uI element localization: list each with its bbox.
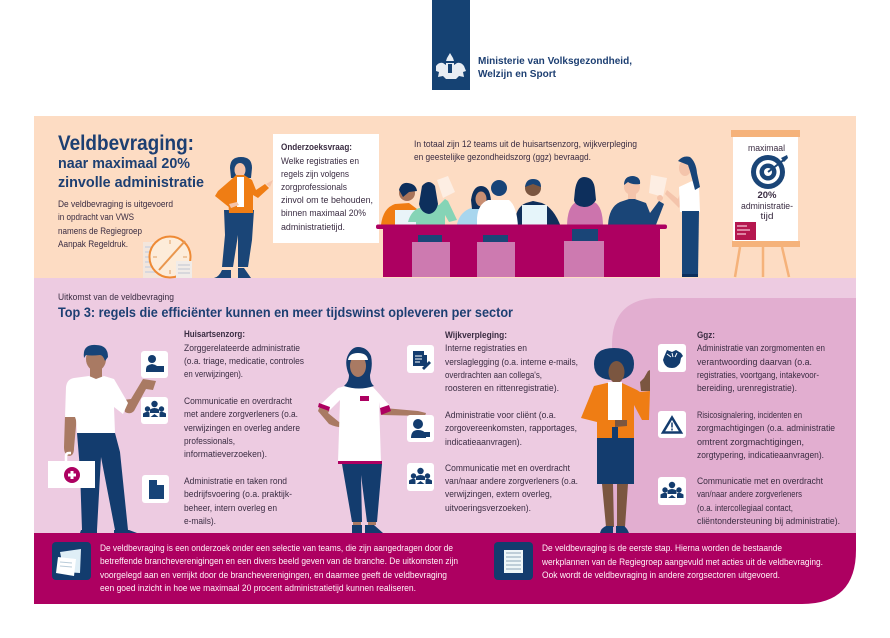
text: huisartsenzorg: verwijzingen en overleg andere: [184, 423, 300, 433]
footer text right: werkplannen van de Regiegroep aangevuld met acties uit de veldbevraging.: [541, 557, 823, 567]
text: huisartsenzorg: (o.a. triage, medicatie, controles: [184, 356, 305, 366]
icon: team of three: [658, 477, 686, 505]
footer text right: De veldbevraging is de eerste stap. Hierna worden de bestaande: [542, 543, 782, 553]
text: wijkverpleging: Interne registraties en: [445, 343, 527, 353]
text: ggz: (o.a. intercollegiaal contact,: [697, 503, 793, 513]
text: wijkverpleging: Administratie voor cliënt (o.a.: [445, 410, 556, 420]
section heading: uitkomst: Top 3: regels die efficiënter kunnen en meer tijdswinst opleveren per sector: [58, 304, 513, 320]
easel with goal poster: tijd: [760, 211, 774, 221]
person: navy sweater with raised hand: [608, 175, 667, 230]
figure: male doctor with medical case: [48, 345, 156, 533]
text: huisartsenzorg: e-mails).: [184, 516, 216, 526]
paper held up: [437, 176, 455, 198]
text: ggz: zorgmachtigingen (o.a. administratie: [697, 423, 835, 433]
easel with goal poster: administratie-: [741, 201, 793, 211]
text: ggz: [697, 330, 840, 526]
icon: documents: [407, 345, 434, 373]
easel with goal poster: maximaal: [748, 143, 785, 153]
text: huisartsenzorg: met andere zorgverleners (o.a.: [184, 409, 298, 419]
intro text: in opdracht van VWS: [58, 212, 134, 222]
text: ggz: Risicosignalering, incidenten en: [697, 410, 802, 420]
icon: target: [751, 155, 788, 189]
text: ggz: verantwoording daarvan (o.a.: [697, 357, 812, 367]
text box: onderzoeksvraag: regels zijn volgens: [281, 169, 350, 179]
title block: [58, 132, 204, 191]
text: ggz: omtrent zorgmachtigingen,: [697, 437, 804, 447]
easel with goal poster: 20%: [758, 190, 777, 200]
person: white shirt seen from back: [477, 180, 518, 227]
ministry name: [478, 55, 632, 80]
icon: team of three: [141, 397, 168, 424]
footer text left: [100, 543, 458, 593]
text box: onderzoeksvraag: binnen maximaal 20%: [281, 208, 366, 218]
icon: stack of forms: [658, 344, 686, 372]
text: wijkverpleging: verwijzingen, extern overleg,: [445, 489, 552, 499]
title block: Veldbevraging:: [58, 132, 194, 155]
text box: onderzoeksvraag: administratietijd.: [281, 222, 345, 232]
text: ggz: zorgtypering, indicatieaanvragen).: [697, 450, 824, 460]
section heading: uitkomst: Uitkomst van de veldbevraging: [58, 292, 174, 302]
text: teams bevraagd: In totaal zijn 12 teams uit de huisartsenzorg, wijkverpleging: [414, 139, 637, 149]
icon: clock with paper stacks: [143, 236, 192, 278]
text: wijkverpleging: van/naar andere zorgverleners (o.a.: [445, 476, 578, 486]
intro text: Aanpak Regeldruk.: [58, 239, 128, 249]
logo ribbon: [432, 0, 470, 90]
header: ministry logo: [432, 0, 632, 90]
text: wijkverpleging: indicatieaanvragen).: [445, 437, 522, 447]
text: huisartsenzorg: [184, 329, 305, 526]
ministry name: Welzijn en Sport: [478, 68, 556, 80]
text: wijkverpleging: Communicatie met en overdracht: [445, 463, 571, 473]
icon: documents on navy tile: [52, 542, 91, 580]
text: huisartsenzorg: bedrijfsvoering (o.a. praktijk-: [184, 489, 292, 499]
figure: nurse with headscarf: [318, 347, 426, 533]
panel: peach introduction background: [34, 116, 856, 278]
text: huisartsenzorg: informatieverzoeken).: [184, 449, 267, 459]
text box: onderzoeksvraag: Onderzoeksvraag:: [281, 142, 352, 152]
illustration: team at table: [376, 156, 700, 277]
text: teams bevraagd: en geestelijke gezondheidszorg (ggz) bevraagd.: [414, 152, 591, 162]
text box: onderzoeksvraag: zinvol om te behouden,: [281, 195, 373, 205]
icon: office building: [142, 475, 169, 503]
title block: naar maximaal 20%: [58, 155, 190, 172]
text: wijkverpleging: zorgovereenkomsten, rapportages,: [445, 423, 577, 433]
ministry name: Ministerie van Volksgezondheid,: [478, 55, 632, 67]
person: pink top seen from back: [567, 177, 603, 229]
panel: pink results background: [34, 278, 856, 534]
text box: onderzoeksvraag: zorgprofessionals: [281, 182, 348, 192]
footer text left: De veldbevraging is een onderzoek onder een selectie van teams, die zijn aangedragen door de: [100, 543, 453, 553]
intro text: [58, 199, 173, 249]
text: wijkverpleging: verslaglegging (o.a. interne e-mails,: [445, 357, 578, 367]
text: wijkverpleging: Wijkverpleging:: [445, 330, 507, 340]
footer text left: voorgelegd aan en verrijkt door de brancheverenigingen, en daarmee geeft de veldbevraging: [100, 570, 447, 580]
section heading: uitkomst: [58, 292, 513, 320]
text: huisartsenzorg: professionals,: [184, 436, 235, 446]
text: wijkverpleging: uitvoeringsverzoeken).: [445, 503, 531, 513]
text: huisartsenzorg: Huisartsenzorg:: [184, 329, 245, 339]
footer text right: Ook wordt de veldbevraging in andere zorgsectoren uitgevoerd.: [542, 570, 780, 580]
text: ggz: Ggz:: [697, 330, 715, 340]
text: ggz: cliëntondersteuning bij administratie).: [697, 516, 840, 526]
figure: woman with orange blazer: [214, 157, 273, 278]
footer text left: betreffende brancheverenigingen en een divers beeld geven van de branche. De uitkomsten zijn: [100, 556, 458, 566]
text: ggz: bereiding, urenregistratie).: [697, 383, 797, 393]
text: ggz: van/naar andere zorgverleners: [697, 489, 803, 499]
intro text: De veldbevraging is uitgevoerd: [58, 199, 173, 209]
icon: medical case: [48, 461, 95, 488]
icon: document on navy tile: [494, 542, 533, 580]
panel: ggz darker background: [612, 298, 856, 534]
person: light blue top: [457, 186, 491, 227]
person: green top: [408, 182, 457, 227]
text box: onderzoeksvraag: [273, 134, 379, 243]
intro text: namens de Regiegroep: [58, 226, 142, 236]
text: wijkverpleging: roosteren en rittenregistratie).: [445, 383, 559, 393]
text: ggz: Administratie van zorgmomenten en: [697, 343, 825, 353]
person: orange sweater: [381, 183, 421, 227]
text: huisartsenzorg: Administratie en taken rond: [184, 476, 287, 486]
title block: zinvolle administratie: [58, 174, 204, 191]
text: wijkverpleging: [445, 330, 578, 513]
panel: magenta footer: [34, 533, 856, 604]
icon: team of three: [407, 463, 434, 491]
badge: ontregel de zorg: [735, 222, 756, 240]
figure: woman with orange blazer and raised finger: [581, 348, 650, 533]
text: ggz: Communicatie met en overdracht: [697, 476, 824, 486]
text: huisartsenzorg: beheer, intern overleg en: [184, 503, 277, 513]
text: huisartsenzorg: Communicatie en overdracht: [184, 396, 293, 406]
footer text right: [541, 543, 823, 580]
table: [376, 224, 667, 277]
text: ggz: registraties, voortgang, intakevoor-: [697, 370, 819, 380]
text: huisartsenzorg: en verwijzingen).: [184, 369, 243, 379]
person: standing woman presenting: [665, 156, 700, 277]
text box: onderzoeksvraag: Welke registraties en: [281, 156, 359, 166]
icon: client: [407, 415, 434, 442]
easel with goal poster: [731, 130, 800, 277]
text: huisartsenzorg: Zorggerelateerde administratie: [184, 343, 300, 353]
footer text left: een goed inzicht in hoe we maximaal 20 procent administratietijd kunnen realiseren.: [100, 583, 416, 593]
person: navy jacket with laptop: [514, 179, 561, 227]
icon: warning triangle: [658, 411, 686, 438]
text: wijkverpleging: overdrachten aan collega's,: [445, 370, 542, 380]
icon: care provider: [141, 351, 168, 378]
text: teams bevraagd: [414, 139, 637, 162]
